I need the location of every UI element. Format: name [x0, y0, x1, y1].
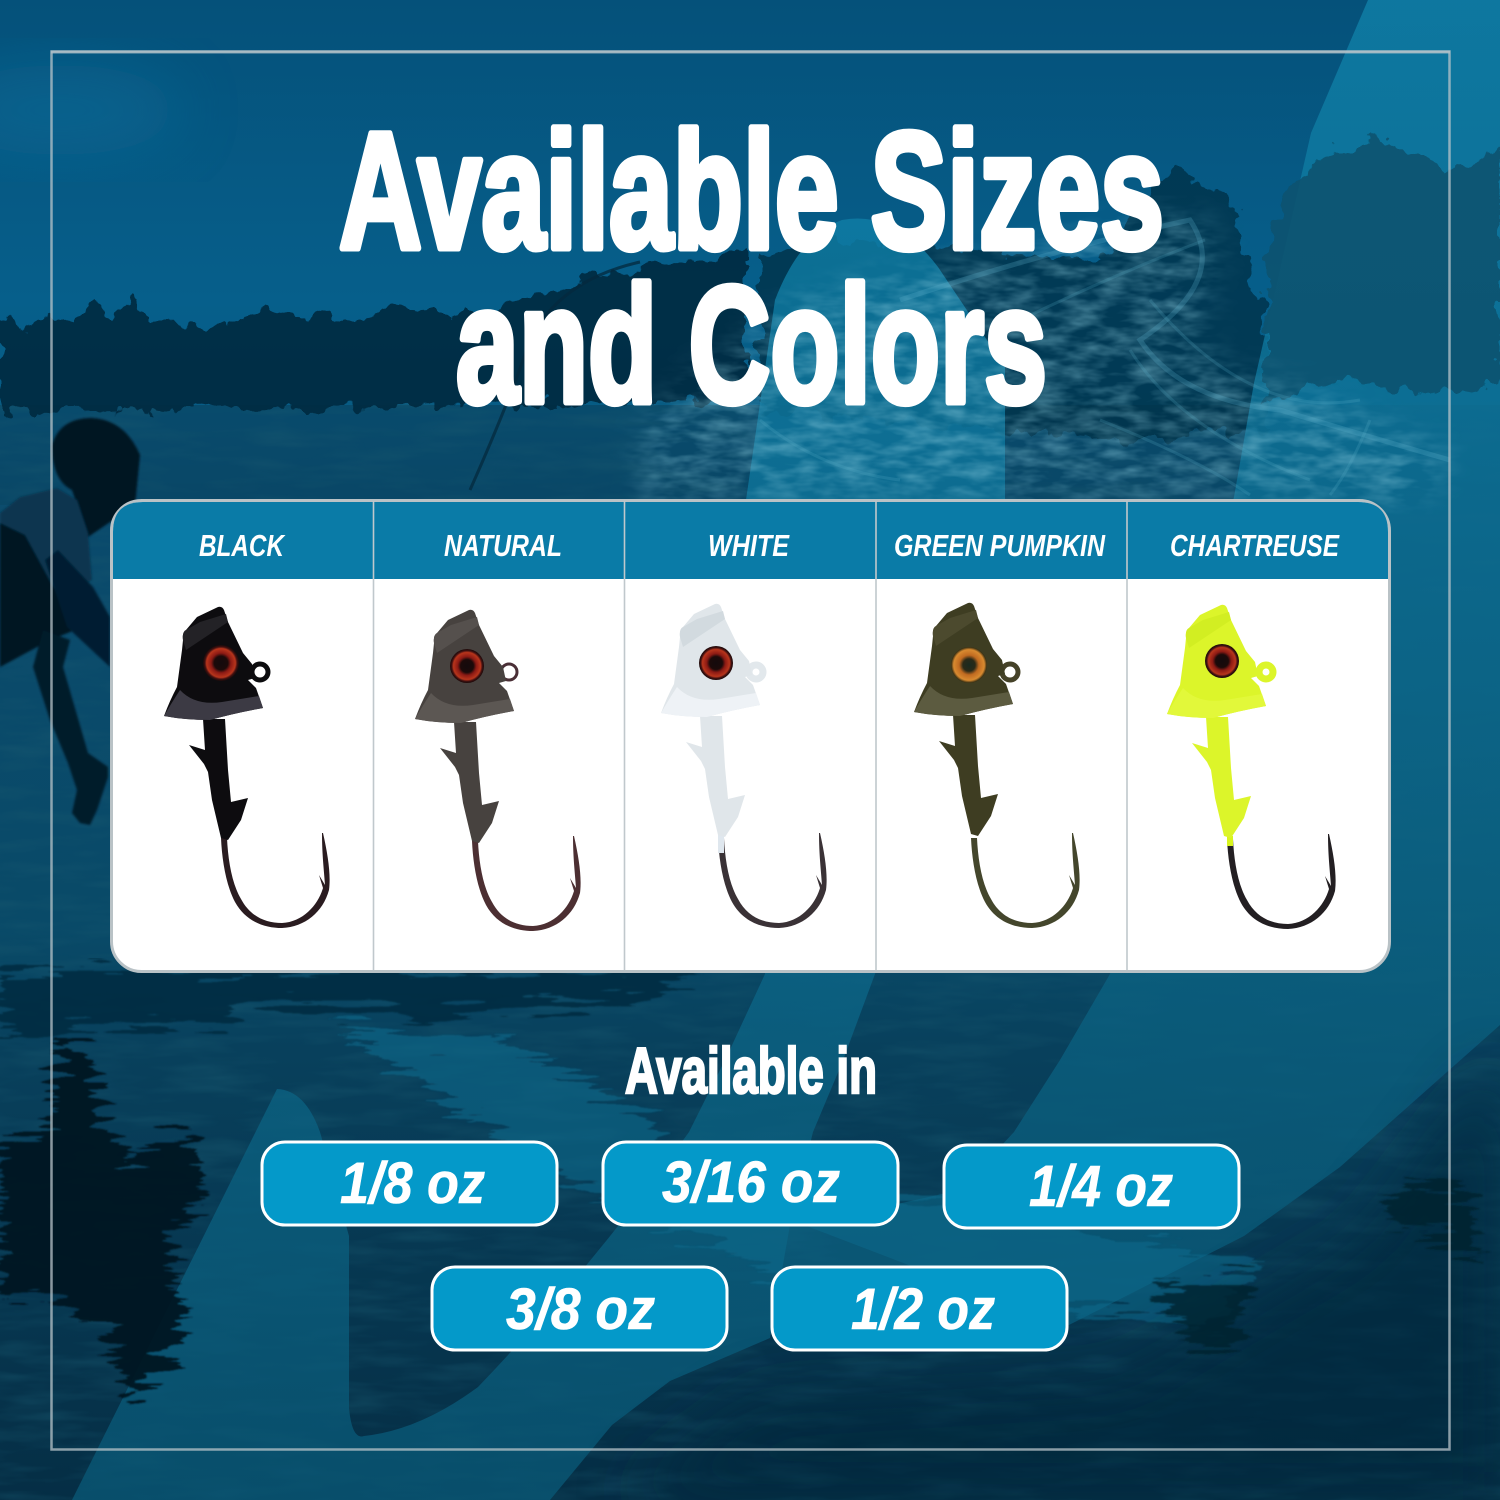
size pill: 1/2 oz [772, 1267, 1067, 1350]
title: Available Sizes [339, 99, 1164, 284]
far water band [0, 405, 1500, 505]
title: and Colors [456, 253, 1047, 438]
swoosh: central tall fin [72, 219, 1005, 1500]
cast net [470, 210, 1450, 500]
panel: color table [112, 500, 1390, 972]
size pill: 3/8 oz: 3/8 oz [506, 1277, 655, 1342]
treeline left [0, 250, 745, 412]
size pill: 1/8 oz [262, 1142, 557, 1225]
size pill: 1/4 oz: 1/4 oz [1029, 1154, 1173, 1219]
sky clouds [0, 65, 180, 155]
size pill: 1/4 oz [944, 1145, 1239, 1228]
treeline behind net [760, 170, 1270, 440]
size pill: 1/2 oz: 1/2 oz [851, 1277, 995, 1342]
heading: available in: Available in [625, 1034, 877, 1107]
size pill: 1/8 oz: 1/8 oz [340, 1151, 485, 1216]
dark patch right lower [620, 1060, 1500, 1500]
dark water patch top [0, 970, 700, 1030]
jig: natural [415, 610, 581, 931]
column labels: CHARTREUSE [1170, 528, 1340, 563]
water highlights lower [340, 1030, 1260, 1330]
column labels: NATURAL [444, 528, 562, 563]
size pill: 3/16 oz: 3/16 oz [662, 1150, 840, 1215]
jig: green pumpkin [914, 603, 1080, 928]
jig: chartreuse [1167, 605, 1336, 929]
jig: white [661, 604, 827, 928]
column labels: WHITE [708, 528, 790, 563]
table header [113, 502, 1388, 579]
dark reflection left [0, 1040, 205, 1400]
column labels [199, 528, 1340, 563]
jig: black [164, 607, 330, 928]
column labels: GREEN PUMPKIN [894, 528, 1105, 563]
title [339, 99, 1164, 438]
swoosh: right upper band [804, 0, 1500, 1326]
column labels: BLACK [199, 528, 286, 563]
size pill: 3/8 oz [432, 1267, 727, 1350]
dark reflection right [1160, 1180, 1480, 1345]
treeline right [1265, 140, 1500, 400]
fisherman silhouette [0, 418, 140, 825]
size pill: 3/16 oz [603, 1142, 898, 1225]
